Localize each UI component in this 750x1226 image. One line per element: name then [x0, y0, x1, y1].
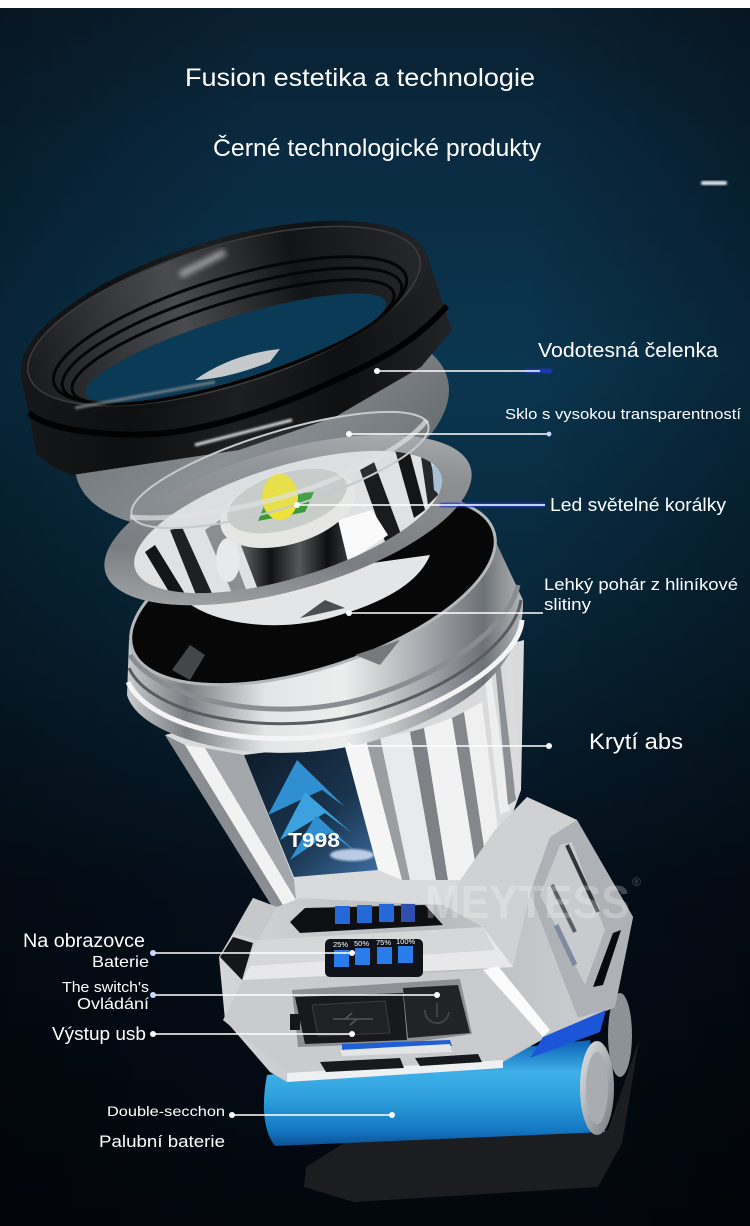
flashlight cup body: [165, 640, 524, 925]
outer reflector shell: [175, 555, 430, 625]
callout: LED beads: [294, 495, 726, 515]
callout: usb output: Výstup usb: [52, 1024, 146, 1044]
callout: switch: [62, 979, 440, 1013]
subtitle: Černé technologické produkty: [213, 134, 541, 162]
callout: switch: The switch's: [62, 979, 149, 996]
callout: glass: [346, 406, 742, 437]
battery display: 75%: [376, 938, 391, 947]
callout: usb output: [52, 1024, 355, 1044]
lower slots: [320, 1040, 482, 1072]
callout: switch: Ovládání: [77, 996, 150, 1013]
rear indicator panel: [290, 904, 443, 933]
callout: battery display: Na obrazovce: [23, 931, 145, 952]
callout: aluminium cup: Lehký pohár z hliníkové: [544, 575, 738, 594]
side handle panel: [530, 820, 633, 1018]
aluminium cup collar and interior: [108, 457, 523, 753]
callout: onboard battery: [99, 1103, 395, 1151]
callout: onboard battery: Palubní baterie: [99, 1132, 225, 1151]
ring groove: [29, 306, 447, 435]
high transparency glass: [121, 388, 439, 552]
reflector cup: [104, 434, 472, 626]
light streak: [701, 181, 727, 185]
callout: aluminium cup: slitiny: [544, 595, 592, 614]
battery display: 100%: [396, 937, 416, 946]
grey glass skirt: [53, 289, 471, 567]
lower face: [223, 970, 543, 1073]
battery plate: [304, 1040, 639, 1202]
callout: aluminium cup: [346, 575, 738, 616]
battery display: [325, 937, 423, 977]
base housing: [219, 797, 633, 1082]
title: Fusion estetika a technologie: [185, 64, 535, 92]
ring opening: [77, 272, 395, 424]
callout: battery display: Baterie: [92, 954, 149, 971]
battery: [264, 993, 632, 1146]
callout: abs cover: Krytí abs: [589, 729, 683, 754]
switch and usb ports: [290, 979, 472, 1047]
callout: waterproof headband: Vodotesná čelenka: [538, 340, 719, 362]
waterproof head ring: [0, 182, 452, 475]
callout: waterproof headband: [374, 340, 719, 374]
battery display: 25%: [333, 940, 348, 949]
top face: [243, 927, 513, 980]
logo panel: [244, 743, 378, 877]
callout: battery display: [23, 931, 355, 971]
callout: LED beads: Led světelné korálky: [550, 495, 726, 515]
brand watermark: ®: [632, 875, 641, 889]
brand watermark: MEYTESS: [425, 876, 630, 928]
black corner facet: [220, 937, 253, 980]
logo panel: T998: [288, 830, 340, 852]
callout: glass: Sklo s vysokou transparentností: [505, 406, 742, 423]
LED module: [211, 453, 365, 563]
callout: onboard battery: Double-secchon: [107, 1103, 225, 1119]
battery display: 50%: [354, 939, 369, 948]
callout: abs cover: [346, 729, 683, 754]
